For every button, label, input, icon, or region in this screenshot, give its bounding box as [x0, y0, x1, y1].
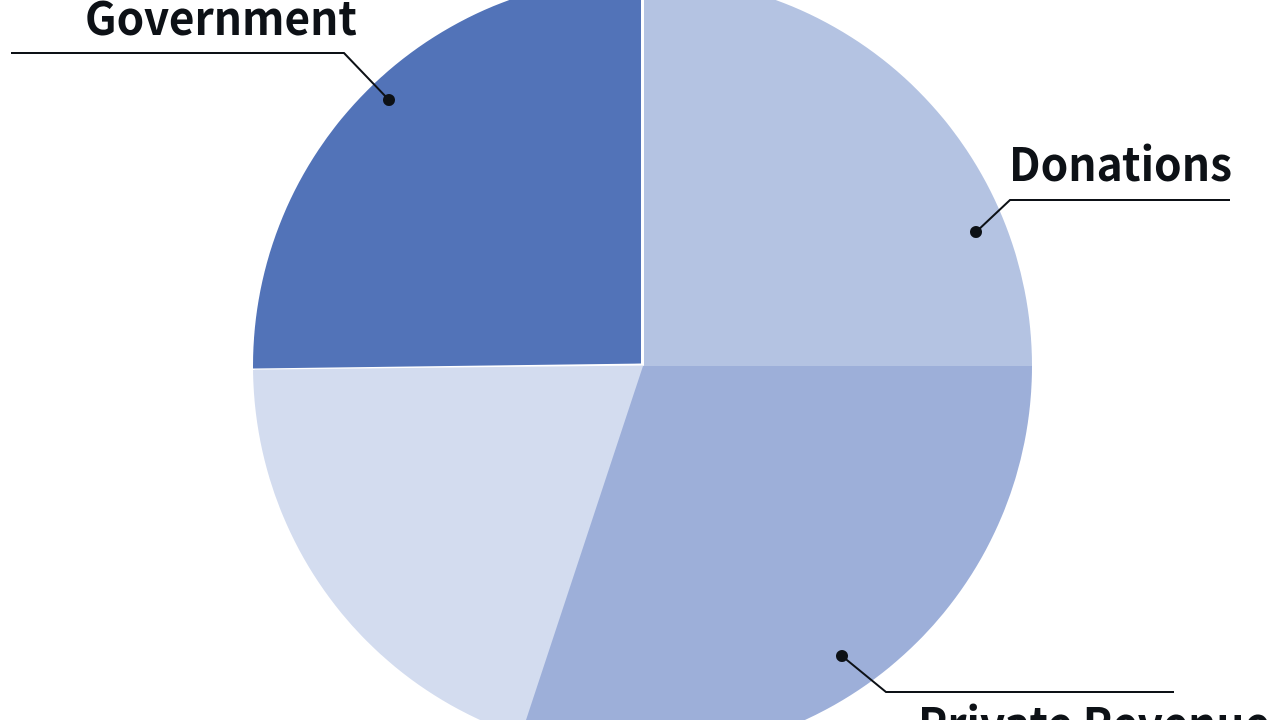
pie chart — [245, 0, 1040, 720]
slice: private revenue — [523, 366, 1040, 720]
label: private revenue — [836, 650, 1270, 720]
slice: donations — [644, 0, 1040, 366]
slice: government — [245, 0, 641, 369]
slice: unlabeled — [245, 366, 644, 720]
label: donations — [970, 129, 1232, 238]
label: donations: Donations — [1009, 129, 1232, 195]
label: government — [11, 0, 395, 106]
